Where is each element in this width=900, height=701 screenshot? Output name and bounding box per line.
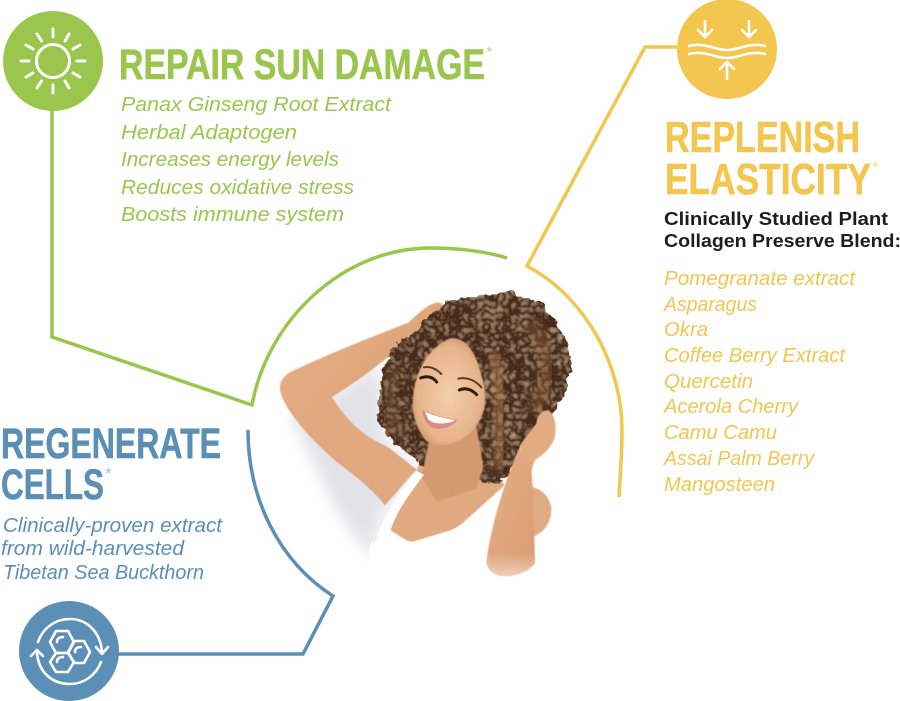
heading: regenerate cells: REGENERATE [1,420,221,468]
icon: skin layers on yellow circle [677,0,777,99]
photo: smiling woman [280,292,570,600]
text: elasticity ingredients: Asparagus [663,294,757,316]
text: elasticity ingredients: Coffee Berry Extract [664,345,846,367]
shoulder fill [313,397,417,505]
asterisk: * [872,158,879,177]
hair [377,292,570,484]
shoulder behind forearm [527,487,551,537]
neck [422,423,483,502]
text: repair ingredients: Herbal Adaptogen [121,122,297,144]
wall shadow [290,363,417,557]
text: repair ingredients: Reduces oxidative stress [121,177,354,199]
subheading: plant collagen blend: Clinically Studied Plant [664,209,888,229]
text: repair ingredients [121,94,393,226]
chest [390,447,505,543]
heading: regenerate cells [1,420,221,509]
heading: regenerate cells: CELLS [1,461,104,509]
eyes and brows [421,367,481,395]
text: elasticity ingredients: Quercetin [664,371,753,393]
text: elasticity ingredients: Okra [664,319,708,341]
white top [363,471,525,600]
text: regenerate description: Tibetan Sea Buckthorn [3,562,204,584]
icon: sun on green circle [3,11,103,111]
raised arm and shoulder [280,303,444,505]
hair highlights [492,353,500,470]
heading: replenish elasticity [665,113,871,204]
forearm [487,450,537,576]
text: repair ingredients: Boosts immune system [121,204,344,226]
text: elasticity ingredients: Mangosteen [664,474,775,496]
text: repair ingredients: Increases energy levels [121,149,339,171]
connector: yellow line and arc [527,47,677,497]
subheading: plant collagen blend [664,209,900,251]
hand in hair [519,411,556,462]
text: regenerate description: Clinically-proven extract [3,515,223,537]
face [413,338,485,445]
icon: cells on blue circle [19,601,119,701]
text: regenerate description: from wild-harvested [1,538,185,560]
text: repair ingredients: Panax Ginseng Root Extract [121,94,393,116]
text: elasticity ingredients [663,268,856,496]
subheading: plant collagen blend: Collagen Preserve Blend: [664,231,900,251]
connector: green line and arc [52,100,507,405]
bottom fade [353,553,540,600]
asterisk: * [105,464,112,483]
text: elasticity ingredients: Assai Palm Berry [663,448,815,470]
text: elasticity ingredients: Pomegranate extract [664,268,856,290]
text: regenerate description [1,515,223,584]
text: elasticity ingredients: Camu Camu [664,422,777,444]
text: elasticity ingredients: Acerola Cherry [663,396,799,418]
heading: repair sun damage: REPAIR SUN DAMAGE [119,41,485,89]
connector: blue line and arc [118,430,333,654]
asterisk: * [486,43,493,62]
smile [422,410,457,429]
